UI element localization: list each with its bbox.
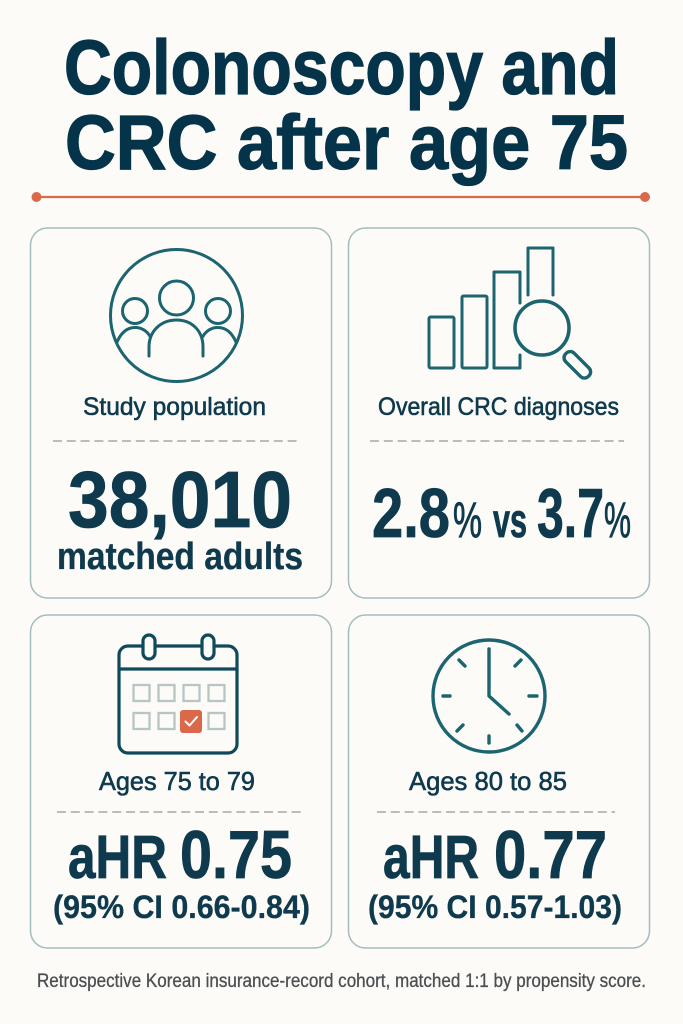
label: ages 80 to 85: Ages 80 to 85 [409, 766, 567, 796]
confidence interval 0.57-1.03: (95% CI 0.57-1.03) [368, 889, 622, 925]
stat: 2.8% vs 3.7%: vs [493, 495, 527, 548]
stat: aHR 0.75 [68, 817, 292, 893]
title: CRC after age 75 [65, 100, 628, 186]
icon: bar chart with magnifying glass [429, 248, 593, 380]
stat: 2.8% vs 3.7%: 3.7 [537, 474, 604, 552]
icon: group of people in circle [110, 250, 242, 382]
stat: aHR 0.77: 0.77 [494, 817, 607, 893]
stat caption: matched adults: matched adults [57, 536, 303, 578]
panel: ages 80 to 85 [348, 615, 650, 948]
confidence interval 0.66-0.84: (95% CI 0.66-0.84) [53, 889, 310, 925]
stat: aHR 0.77: aHR [383, 823, 479, 891]
stat: aHR 0.77 [383, 817, 607, 893]
stat: 2.8% vs 3.7%: % [604, 492, 631, 548]
panel: ages 75 to 79 [30, 615, 332, 948]
icon: clock [433, 640, 545, 752]
label: study population: Study population [83, 393, 266, 421]
stat: 38,010: 38,010 [68, 455, 292, 544]
stat: 2.8% vs 3.7% [372, 474, 631, 552]
stat: aHR 0.75: 0.75 [180, 817, 292, 893]
stat: 2.8% vs 3.7%: 2.8 [372, 474, 450, 552]
stat: 2.8% vs 3.7%: % [453, 492, 482, 548]
panel: study population [30, 228, 332, 598]
title [64, 25, 628, 186]
panel: overall CRC diagnoses [348, 228, 650, 598]
icon: calendar with checked day [119, 635, 237, 753]
label: ages 75 to 79: Ages 75 to 79 [99, 766, 255, 796]
label: overall CRC diagnoses: Overall CRC diagnoses [378, 393, 619, 421]
title rule with end dots [32, 192, 650, 202]
stat: aHR 0.75: aHR [68, 823, 167, 891]
